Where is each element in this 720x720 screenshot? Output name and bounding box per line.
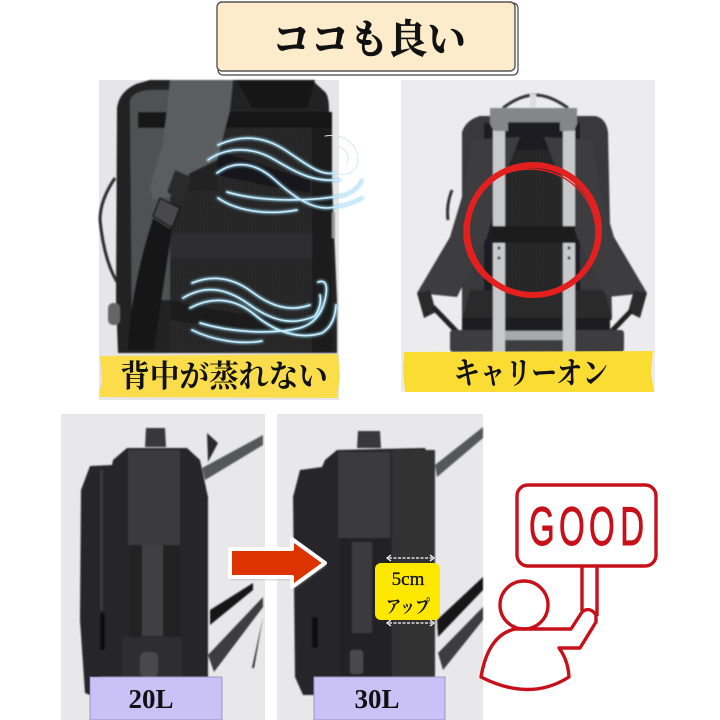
panel: breathable back	[99, 80, 362, 400]
size label 30L: 30L	[354, 684, 400, 714]
title banner: ココも良い	[272, 17, 466, 62]
backpack side 20L	[80, 428, 263, 695]
backpack rear view	[100, 80, 337, 353]
size label 20L	[90, 677, 222, 720]
size label 30L	[314, 677, 445, 720]
icon: person holding GOOD sign: GOOD	[529, 495, 644, 557]
callout: 5cm up	[375, 555, 440, 626]
yellow caption tape: キャリーオン	[454, 356, 608, 391]
backpack on trolley	[417, 94, 647, 352]
panel: carry-on	[401, 80, 655, 392]
panel: 30L side view	[277, 414, 483, 720]
title banner	[217, 2, 518, 75]
yellow caption tape	[403, 351, 654, 392]
callout: 5cm up: アップ	[386, 597, 430, 617]
backpack side 30L	[293, 427, 483, 695]
yellow caption tape: 背中が蒸れない	[120, 359, 328, 394]
icon: person holding GOOD sign	[481, 485, 656, 690]
icon: air flow waves	[183, 136, 362, 342]
size label 20L: 20L	[128, 684, 174, 714]
red circle highlight	[464, 165, 599, 295]
callout: 5cm up: 5cm	[392, 569, 425, 590]
panel: 20L side view	[61, 414, 265, 720]
arrow: 20L to 30L	[230, 539, 326, 589]
